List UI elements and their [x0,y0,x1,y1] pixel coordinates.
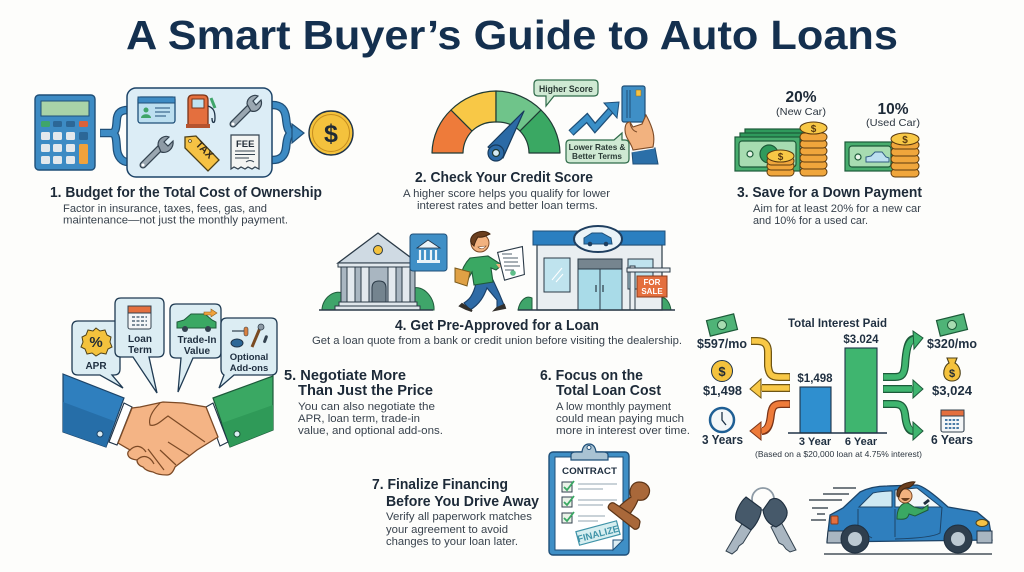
icon: calendar [941,410,964,432]
value: 6 year: $3.024 [843,334,879,346]
footnote: (Based on a $20,000 loan at 4.75% interest) [755,449,922,459]
bar: 6 year [845,348,877,433]
for sale sign: SALE [641,287,663,296]
icon: tax tag: TAX [193,139,216,161]
bubble: APR [72,321,123,388]
icon: fee receipt: FEE [236,139,254,150]
bubble: optional add-ons: Add-ons [230,363,268,374]
icon: dollar coin small [712,360,732,382]
icon: small bank badge [410,234,447,271]
panel: 4 pre-approval [312,226,682,347]
icon: adjustable wrench [142,136,173,166]
bubble: higher score: Higher Score [539,84,593,95]
icon: insurance card [138,97,175,123]
gauge [432,91,560,161]
text: credit description: A higher score helps you qualify for lower [403,188,610,200]
label: 20 percent: 20% [785,89,817,106]
icon: clock [710,408,734,432]
bubble: loan term: Term [128,345,152,356]
label: 6 years: 6 Years [931,432,973,447]
panel: 5 negotiate [63,298,443,475]
bubble: APR: APR [85,361,107,372]
icon: cash right [936,314,968,336]
heading 5: 5. Negotiate More [284,367,406,384]
needle [488,111,524,161]
icon: cash with coins 10 percent [845,133,919,177]
bubble: lower rates: Lower Rates & [569,143,626,152]
icon: contract clipboard [549,444,650,555]
for sale sign: FOR [644,278,661,287]
arrow: orange 3 years [750,404,790,440]
heading 4: 4. Get Pre-Approved for a Loan [395,317,599,334]
driver [897,482,929,519]
arrow: yellow 1498 [750,379,790,398]
bubble: trade-in value [170,304,221,392]
icon: handshake [63,374,273,475]
heading 2: 2. Check Your Credit Score [415,169,593,186]
label: 3 years: 3 Years [702,432,743,447]
bubble: trade-in value: Trade-In [178,335,216,346]
label: 1498: $1,498 [703,383,742,398]
arrow: green 6 years [883,404,923,440]
text: credit description: interest rates and better loan terms. [417,200,598,212]
icon: bank [319,233,434,310]
icon: money bag: $ [949,368,955,380]
icon: dollar coin small: $ [718,364,726,379]
text: down payment description: Aim for at least 20% for a new car [753,203,921,215]
heading 6: Total Loan Cost [556,382,661,399]
text: budget description: maintenance—not just the monthly payment. [63,214,288,226]
arrow: yellow 597 per month [751,341,790,377]
label: 10 percent: 10% [877,101,909,118]
bubble: lower rates [566,133,629,163]
icon: man walking with approval letter [455,231,525,311]
text: budget description: Factor in insurance, taxes, fees, gas, and [63,203,267,215]
text: finalize description: changes to your loan later. [386,536,518,548]
text: total cost description: more in interest over time. [556,425,690,437]
icon: calculator [35,95,95,170]
text: finalize description: your agreement to avoid [386,524,508,536]
heading 1: 1. Budget for the Total Cost of Ownership [50,184,322,201]
bubble: trade-in value: Value [184,346,210,357]
rubber stamp [608,482,650,529]
text: negotiate description: value, and optional add-ons. [298,425,443,437]
icon: contract clipboard: CONTRACT [562,466,617,477]
axis label: 3 year: 3 Year [799,436,832,448]
label: new car: (New Car) [776,106,826,118]
icon: cash with coins 20 percent [735,122,827,176]
checklist [562,481,617,523]
arrow: green 3024 [883,380,923,398]
panel: 3 down payment [735,89,922,227]
text: pre-approval description: Get a loan quote from a bank or credit union before visiting the dealership. [312,335,682,347]
icon: tax tag [185,136,219,171]
panel: 1 budget [35,88,353,226]
bubble: APR: % [89,334,103,351]
chart title: Total Interest Paid [788,318,887,330]
heading 6: 6. Focus on the [540,367,643,384]
icon: hand holding credit card [622,86,658,164]
bar chart: total interest paid [697,314,977,459]
icon: cash with coins 10 percent: $ [902,135,908,146]
arrow: green 320 per month [883,331,923,377]
text: finalize description: Verify all paperwork matches [386,511,533,523]
icon: dollar coin [309,111,353,155]
panel: 6 total loan cost text [540,367,690,437]
panel: 7 finalize [372,444,650,555]
title: A Smart Buyer’s Guide to Auto Loans [126,12,898,58]
text: down payment description: and 10% for a used car. [753,215,868,227]
icon: fee receipt [231,135,259,169]
text: negotiate description: APR, loan term, trade-in [298,413,420,425]
bubble: loan term: Loan [128,334,152,345]
finalize stamp mark: FINALIZE [576,524,620,545]
icon: wrench [232,95,261,126]
icon: cash left [706,314,738,336]
bubble: higher score [534,80,598,106]
value: 3 year: $1,498 [797,373,833,385]
heading 7: Before You Drive Away [386,493,540,510]
icon: cash with coins 20 percent: $ [811,124,817,135]
heading 3: 3. Save for a Down Payment [737,184,922,201]
bubble: lower rates: Better Terms [572,152,622,161]
panel: 2 credit score [403,80,658,212]
icon: blue car with driver [824,482,992,554]
label: used car: (Used Car) [866,117,920,129]
label: 3024: $3,024 [932,383,973,398]
icon: dealership [518,226,675,310]
bar: 3 year [800,387,831,433]
for sale sign [637,276,667,297]
icon: money bag [944,358,960,381]
label: 597 per month: $597/mo [697,336,747,351]
bracket and arrow: right [272,105,304,160]
illustration: keys and car [726,482,992,554]
box of ownership costs [127,88,272,177]
icon: speed lines [809,488,856,520]
bracket: left [100,110,128,162]
text: total cost description: could mean paying much [556,413,684,425]
icon: cash with coins 20 percent: $ [778,152,784,163]
icon: dollar coin: $ [324,120,338,148]
heading 5: Than Just the Price [298,382,433,399]
text: negotiate description: You can also negotiate the [298,401,435,413]
icon: gas pump [186,95,215,128]
heading 7: 7. Finalize Financing [372,476,508,493]
label: 320 per month: $320/mo [927,336,977,351]
axis label: 6 year: 6 Year [845,436,878,448]
icon: car keys [726,488,796,554]
bubble: optional add-ons [219,318,277,388]
arrow: rising trend [571,102,619,133]
text: total cost description: A low monthly payment [556,401,671,413]
bubble: optional add-ons: Optional [230,352,268,363]
bubble: loan term [115,298,164,393]
